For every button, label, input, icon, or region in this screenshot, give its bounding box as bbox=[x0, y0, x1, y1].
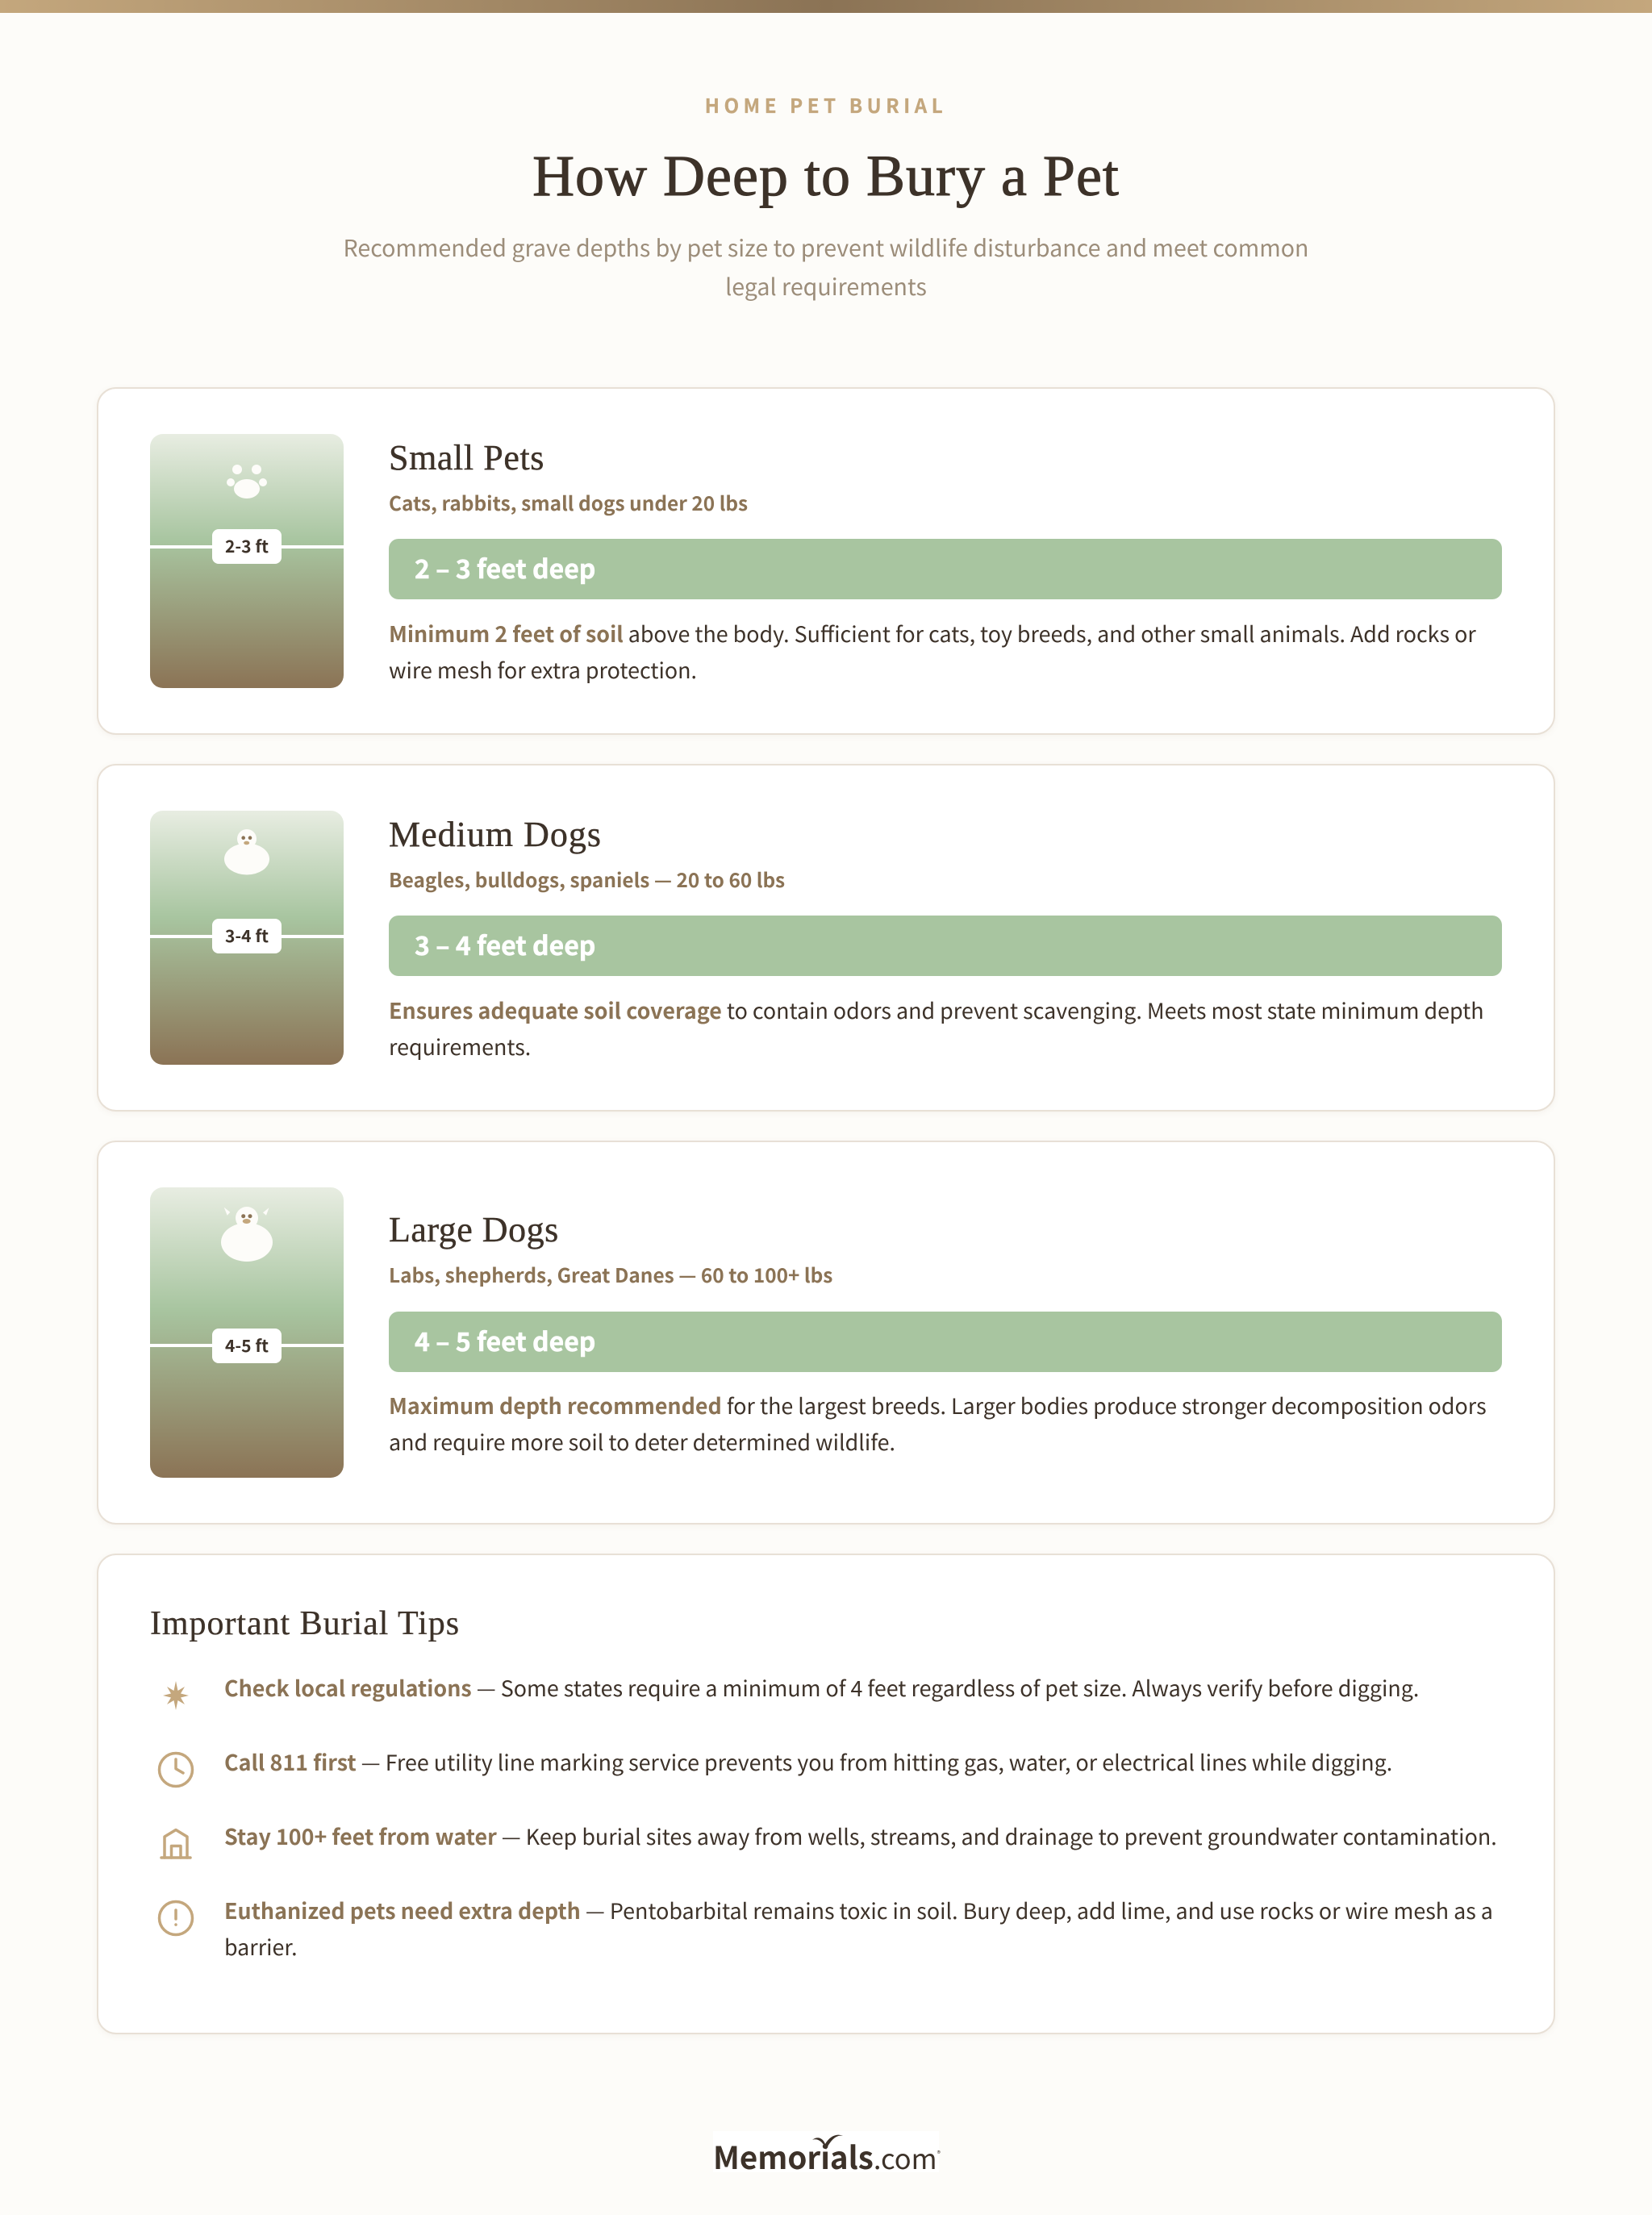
depth bar: large dogs: 4 – 5 feet deep bbox=[415, 1322, 595, 1359]
description: small pets: wire mesh for extra protection. bbox=[389, 653, 697, 684]
depth bar: medium dogs bbox=[389, 916, 1502, 976]
description: medium dogs bbox=[389, 994, 1484, 1062]
subheading: medium dogs: Beagles, bulldogs, spaniels — 20 to 60 lbs bbox=[389, 865, 785, 894]
depth gauge: large dogs: 4-5 ft bbox=[225, 1333, 269, 1358]
subtitle: Recommended grave depths by pet size to prevent wildlife disturbance and meet common bbox=[344, 231, 1308, 263]
depth bar: small pets bbox=[389, 539, 1502, 599]
depth bar: medium dogs: 3 – 4 feet deep bbox=[415, 926, 595, 963]
tip: local regulations: Check local regulations — Some states require a minimum of 4 feet regardless of pet size. Always verify before digging. bbox=[224, 1671, 1419, 1702]
tip: water distance: Stay 100+ feet from water — Keep burial sites away from wells, streams, and drainage to prevent groundwater contamination. bbox=[224, 1820, 1497, 1850]
description: small pets bbox=[389, 616, 1476, 684]
panel: small pets bbox=[97, 387, 1555, 735]
icon: large dog bbox=[221, 1207, 273, 1262]
depth bar: small pets: 2 – 3 feet deep bbox=[415, 549, 595, 586]
logo bird bbox=[812, 2134, 843, 2150]
logo bbox=[713, 2131, 939, 2172]
top gradient bar bbox=[0, 0, 1652, 13]
icon: clock bbox=[158, 1752, 194, 1787]
depth gauge: medium dogs: 3-4 ft bbox=[225, 924, 269, 948]
icon: medium dog bbox=[224, 829, 269, 874]
heading: small pets: Small Pets bbox=[389, 438, 544, 478]
subheading: large dogs: Labs, shepherds, Great Danes — 60 to 100+ lbs bbox=[389, 1260, 832, 1289]
description: medium dogs: Ensures adequate soil coverage to contain odors and prevent scavenging. Meets most state minimum depth bbox=[389, 994, 1484, 1024]
subtitle bbox=[344, 231, 1308, 302]
panel: large dogs bbox=[97, 1141, 1555, 1525]
icon: star bbox=[163, 1681, 189, 1710]
panel: burial tips bbox=[97, 1554, 1555, 2034]
depth bar: large dogs bbox=[389, 1312, 1502, 1372]
icon: paw bbox=[227, 465, 267, 498]
description: large dogs: Maximum depth recommended for the largest breeds. Larger bodies produce stronger decomposition odors bbox=[389, 1389, 1487, 1420]
depth gauge: large dogs bbox=[150, 1187, 344, 1478]
icon: alert bbox=[158, 1900, 194, 1936]
depth gauge: small pets: 2-3 ft bbox=[225, 534, 269, 558]
depth gauge: small pets bbox=[150, 434, 344, 688]
depth gauge: medium dogs bbox=[150, 811, 344, 1065]
tip: call 811: Call 811 first — Free utility line marking service prevents you from hitting gas, water, or electrical lines while digging. bbox=[224, 1746, 1392, 1776]
description: small pets: Minimum 2 feet of soil above the body. Sufficient for cats, toy breeds, and other small animals. Add rocks or bbox=[389, 616, 1476, 649]
panel: medium dogs bbox=[97, 764, 1555, 1112]
tip: euthanized pets bbox=[224, 1894, 1493, 1962]
subheading: small pets: Cats, rabbits, small dogs under 20 lbs bbox=[389, 489, 748, 516]
heading: burial tips: Important Burial Tips bbox=[150, 1605, 460, 1642]
description: large dogs: and require more soil to deter determined wildlife. bbox=[389, 1425, 895, 1457]
description: medium dogs: requirements. bbox=[389, 1029, 531, 1062]
subtitle: legal requirements bbox=[725, 269, 927, 302]
tip: euthanized pets: barrier. bbox=[224, 1929, 298, 1962]
heading: large dogs: Large Dogs bbox=[389, 1210, 559, 1249]
title: How Deep to Bury a Pet bbox=[532, 144, 1120, 208]
heading: medium dogs: Medium Dogs bbox=[389, 815, 602, 854]
eyebrow: HOME PET BURIAL bbox=[705, 90, 947, 119]
tip: euthanized pets: Euthanized pets need extra depth — Pentobarbital remains toxic in soil. Bury deep, add lime, and use rocks or wire mesh as a bbox=[224, 1894, 1493, 1925]
description: large dogs bbox=[389, 1389, 1487, 1457]
logo wordmark: Memorials.com® bbox=[713, 2134, 941, 2179]
icon: house bbox=[160, 1828, 192, 1859]
